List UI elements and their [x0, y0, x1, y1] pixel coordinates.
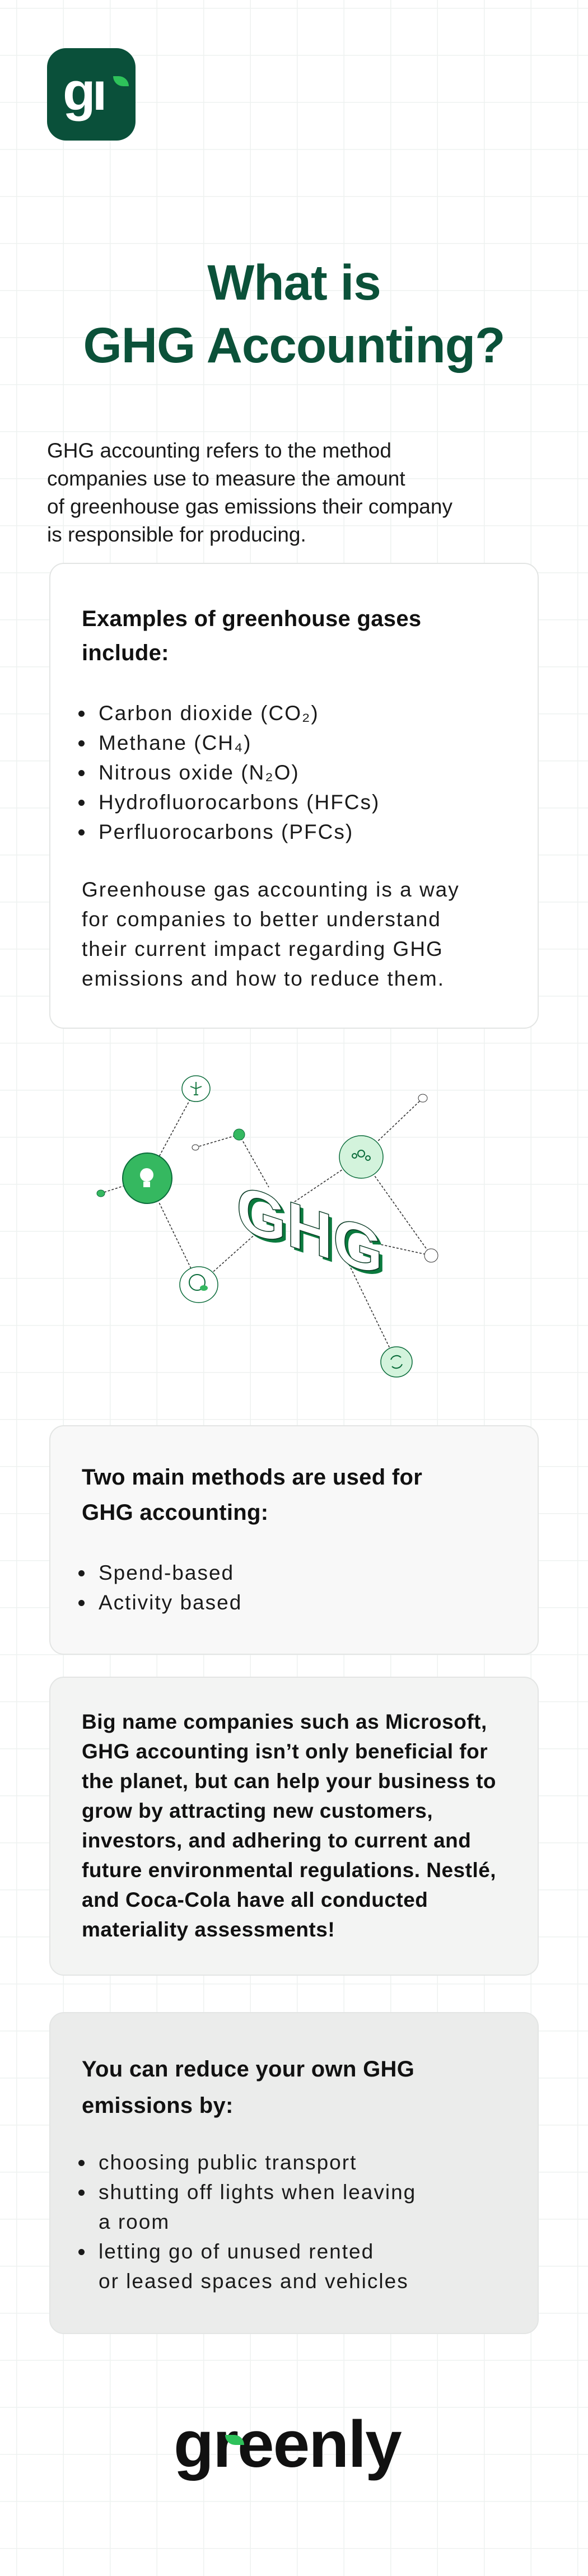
list: actions: choosing public transport [99, 2151, 357, 2174]
intro paragraph: of greenhouse gas emissions their company [47, 495, 452, 518]
GHG 3D text: GHG [236, 1171, 383, 1290]
paragraph: and Coca-Cola have all conducted [82, 1888, 428, 1911]
paragraph: for companies to better understand [82, 908, 441, 931]
list: methods: Spend-based [99, 1561, 234, 1584]
list: gases: Perfluorocarbons (PFCs) [99, 820, 353, 843]
panel: reduce emissions [49, 2012, 539, 2334]
intro paragraph: GHG accounting refers to the method [47, 439, 391, 462]
heading: emissions by: [82, 2093, 234, 2118]
heading [82, 606, 421, 665]
list: gases: Hydrofluorocarbons (HFCs) [99, 791, 380, 814]
list: methods: Activity based [99, 1591, 242, 1614]
icon: people node [339, 1136, 383, 1178]
list: actions [78, 2151, 416, 2293]
list: gases: Carbon dioxide (CO₂) [99, 702, 319, 725]
list: actions: letting go of unused rented [99, 2240, 374, 2263]
GHG 3D text: GHG [240, 1174, 386, 1294]
list: methods [78, 1561, 242, 1614]
paragraph: emissions and how to reduce them. [82, 967, 445, 990]
heading: include: [82, 641, 169, 665]
title [83, 254, 505, 373]
icon: recycle node [381, 1347, 412, 1377]
paragraph [82, 1710, 496, 1941]
intro paragraph [47, 439, 452, 546]
icon: leaf [113, 76, 129, 86]
icon: earth node [180, 1267, 218, 1303]
panel: greenhouse gases examples [49, 563, 539, 1029]
dots [97, 1094, 438, 1262]
panel: two methods [49, 1425, 539, 1655]
heading: GHG accounting: [82, 1500, 268, 1525]
heading: Examples of greenhouse gases [82, 606, 421, 631]
list: gases [78, 702, 380, 843]
illustration: GHG network [96, 1075, 438, 1378]
paragraph: grow by attracting new customers, [82, 1799, 433, 1822]
paragraph: the planet, but can help your business to [82, 1770, 496, 1793]
paragraph: their current impact regarding GHG [82, 937, 444, 960]
paragraph: Greenhouse gas accounting is a way [82, 878, 460, 901]
icon: lightbulb node [123, 1153, 172, 1203]
heading: You can reduce your own GHG [82, 2057, 414, 2082]
logo badge: gı [63, 62, 104, 122]
intro paragraph: is responsible for producing. [47, 523, 306, 546]
panel: big companies [49, 1677, 539, 1976]
list: actions: shutting off lights when leaving [99, 2181, 416, 2204]
list: gases: Methane (CH₄) [99, 731, 251, 754]
intro paragraph: companies use to measure the amount [47, 467, 405, 490]
icon: leaf [225, 2435, 244, 2445]
paragraph: materiality assessments! [82, 1918, 335, 1941]
footer logo: greenly: greenly [174, 2407, 401, 2481]
paragraph: GHG accounting isn’t only beneficial for [82, 1740, 488, 1763]
title: What is [207, 254, 381, 310]
list: actions: a room [99, 2210, 170, 2233]
heading [82, 2057, 414, 2118]
paragraph: future environmental regulations. Nestlé, [82, 1859, 496, 1882]
heading [82, 1465, 422, 1525]
icon: windmill node [182, 1076, 210, 1102]
logo badge [47, 48, 136, 141]
list: gases: Nitrous oxide (N₂O) [99, 761, 300, 784]
paragraph: Big name companies such as Microsoft, [82, 1710, 487, 1733]
paragraph [82, 878, 460, 990]
title: GHG Accounting? [83, 317, 505, 373]
heading: Two main methods are used for [82, 1465, 422, 1490]
paragraph: investors, and adhering to current and [82, 1829, 471, 1852]
list: actions: or leased spaces and vehicles [99, 2270, 409, 2293]
